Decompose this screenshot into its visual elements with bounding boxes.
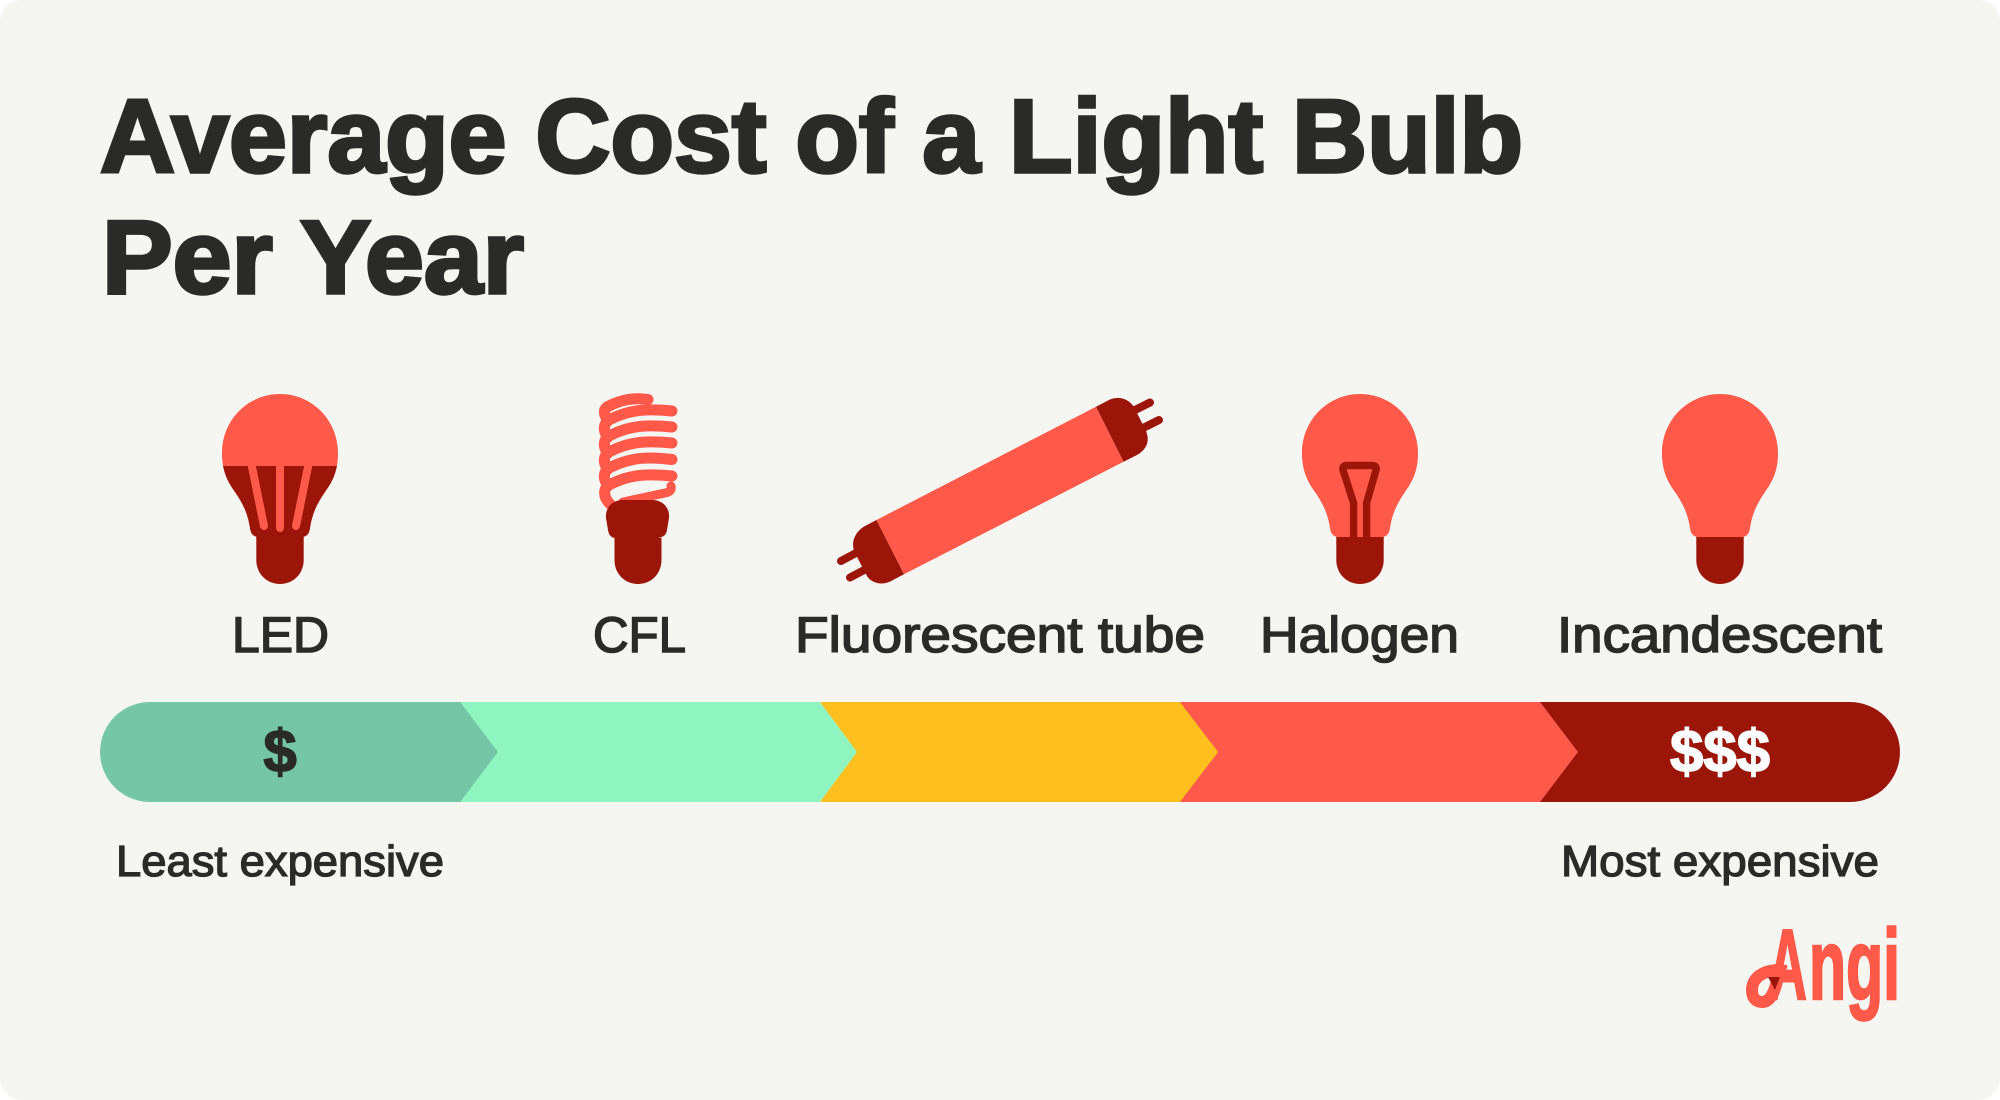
label: LED: LED	[232, 607, 329, 663]
title: Average Cost of a Light Bulb	[100, 79, 1523, 195]
label: Incandescent: Incandescent	[1557, 607, 1882, 663]
segment: dark red	[1500, 702, 1900, 802]
label: Fluorescent tube: Fluorescent tube	[795, 607, 1205, 663]
label: least expensive: Least expensive	[116, 837, 444, 886]
cost scale bar	[100, 702, 1900, 802]
icon: halogen bulb	[1302, 394, 1418, 584]
label: Halogen: Halogen	[1260, 607, 1459, 663]
logo: Angi	[1752, 909, 1900, 1021]
segment: green	[100, 702, 498, 802]
label: most expensive: Most expensive	[1561, 837, 1879, 886]
icon: incandescent bulb	[1662, 394, 1778, 584]
segment: mint	[420, 702, 857, 802]
segment: amber	[780, 702, 1218, 802]
logo: Angi: ngi	[1809, 909, 1900, 1021]
segment: coral	[1140, 702, 1578, 802]
icon: CFL bulb	[604, 399, 672, 584]
title: Per Year	[102, 200, 524, 316]
logo: Angi: A	[1768, 909, 1807, 1021]
one dollar sign: $	[263, 718, 297, 785]
icon: LED bulb	[222, 394, 338, 584]
icon: fluorescent tube	[841, 398, 1159, 583]
title	[100, 79, 1523, 316]
three dollar signs: $$$	[1670, 718, 1770, 785]
label: CFL: CFL	[593, 607, 686, 663]
